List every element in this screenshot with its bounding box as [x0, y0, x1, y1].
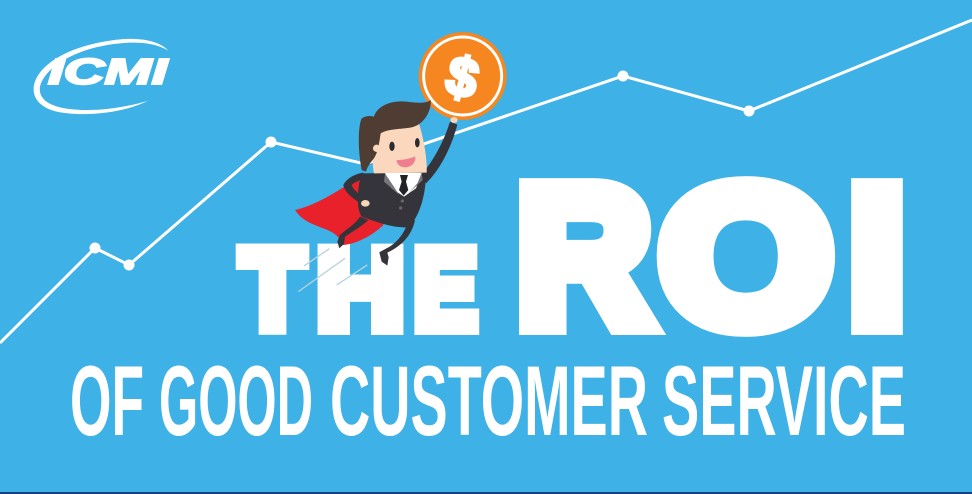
- line chart: [0, 20, 972, 343]
- hair: [359, 100, 431, 172]
- heading: roi: [517, 147, 905, 366]
- heading: roi: I: [849, 147, 905, 366]
- coin: [419, 32, 507, 120]
- logo wordmark: ICMI: [48, 51, 169, 92]
- bottom bar: [0, 492, 972, 494]
- heading: the: E: [414, 227, 477, 352]
- legs: [337, 217, 368, 248]
- icmi logo: [34, 39, 169, 114]
- suit body: [358, 173, 426, 227]
- heading: the: H: [317, 227, 404, 352]
- heading: roi: O: [660, 147, 832, 366]
- suit arm on hip: [343, 173, 366, 204]
- red cape: [295, 180, 383, 245]
- heading: the: T: [241, 227, 304, 352]
- shirt collar: [385, 173, 422, 197]
- face: [373, 117, 427, 173]
- hip hand: [361, 200, 370, 207]
- hand: [450, 117, 458, 123]
- heading: roi: R: [517, 147, 651, 366]
- subheading: GOOD: [159, 345, 313, 456]
- dollar sign: $: [440, 43, 485, 111]
- buttons: [401, 199, 404, 203]
- necktie: [399, 175, 408, 196]
- speed lines: [298, 249, 367, 292]
- lapels: [384, 173, 423, 195]
- subheading: [70, 345, 906, 456]
- heading: the: [241, 227, 477, 352]
- subheading: OF: [70, 345, 144, 456]
- mouth: [397, 156, 415, 167]
- raised arm: [422, 122, 457, 183]
- subheading: CUSTOMER: [330, 345, 648, 456]
- superhero businessman illustration: [295, 32, 507, 292]
- logo swoosh: [34, 39, 168, 114]
- ear: [373, 145, 380, 152]
- eyes: [389, 142, 395, 151]
